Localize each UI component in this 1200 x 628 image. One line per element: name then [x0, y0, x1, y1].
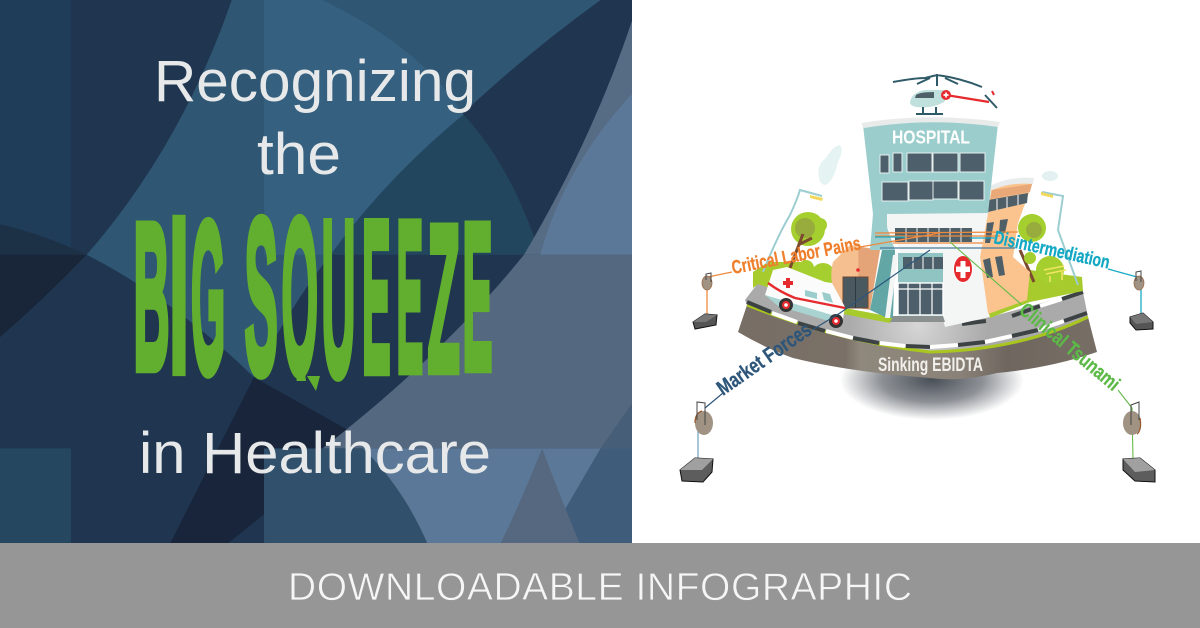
footer bar	[0, 543, 1200, 628]
clouds	[818, 145, 842, 185]
right peach wing	[980, 182, 1033, 314]
cable: disintermediation	[875, 237, 1137, 277]
shadow under ground	[840, 340, 1024, 420]
heading: BIG SQUEEZE: U	[322, 176, 355, 424]
main tower	[863, 118, 998, 250]
hospital sign: HOSPITAL	[892, 126, 970, 148]
pulley weight: upper right	[1130, 271, 1153, 330]
right tree	[1018, 214, 1066, 284]
heading: BIG SQUEEZE: B	[134, 180, 170, 414]
heading: BIG SQUEEZE: Z	[428, 183, 460, 416]
right wing windows	[983, 193, 1028, 278]
label: Disintermediation: Disintermediation	[992, 226, 1112, 272]
upper window strip	[895, 228, 972, 242]
heading: BIG SQUEEZE	[136, 214, 492, 391]
white pillar	[885, 255, 898, 318]
helicopter	[893, 74, 997, 114]
heading: BIG SQUEEZE: G	[191, 178, 225, 419]
ambulance	[765, 267, 845, 328]
heading: Recognizing: Recognizing	[154, 49, 476, 114]
ground: road	[745, 283, 1088, 352]
heading: in Healthcare: in Healthcare	[139, 421, 491, 486]
right lawn	[988, 270, 1083, 318]
label: Market Forces: Market Forces	[713, 318, 816, 400]
panel: hospital illustration	[680, 74, 1155, 482]
heading: BIG SQUEEZE: E	[362, 176, 391, 419]
label: Clinical Tsunami: Clinical Tsunami	[1015, 299, 1124, 396]
left street lamp	[763, 190, 822, 272]
heading: BIG SQUEEZE: Q	[282, 174, 318, 422]
heading: BIG SQUEEZE: S	[244, 173, 278, 421]
left lawn	[753, 262, 893, 323]
white hospital body	[887, 213, 990, 327]
cable: clinical tsunami	[950, 242, 1133, 460]
pulley weight: upper left	[693, 273, 717, 329]
road dashes	[747, 292, 1087, 347]
footer text: DOWNLOADABLE INFOGRAPHIC	[288, 566, 912, 609]
dark teal entrance column	[870, 250, 895, 318]
heading: the: the	[257, 122, 341, 187]
pulley weight: lower left	[680, 402, 713, 482]
heading: BIG SQUEEZE: I	[169, 171, 189, 419]
left peach wing	[831, 245, 880, 310]
label: Sinking EBIDTA: Sinking EBIDTA	[878, 354, 983, 376]
left tree	[790, 212, 835, 287]
tower windows	[880, 153, 985, 201]
right street lamp	[1042, 192, 1078, 285]
ground: earth band	[738, 305, 1097, 379]
roof edge	[861, 117, 1000, 128]
cable: critical labor pains	[708, 232, 1018, 277]
pulley weight: lower right	[1123, 402, 1155, 482]
label: Critical Labor Pains: Critical Labor Pains	[730, 233, 863, 279]
panel: dark blue geometric background	[0, 0, 632, 545]
left wing door	[843, 268, 868, 308]
heading: BIG SQUEEZE: E	[396, 176, 423, 417]
red cross sign	[954, 256, 972, 282]
heading: BIG SQUEEZE: E	[462, 181, 493, 414]
central entrance	[890, 253, 945, 322]
cable: market forces	[705, 250, 930, 408]
cable: building beam	[880, 247, 1015, 249]
